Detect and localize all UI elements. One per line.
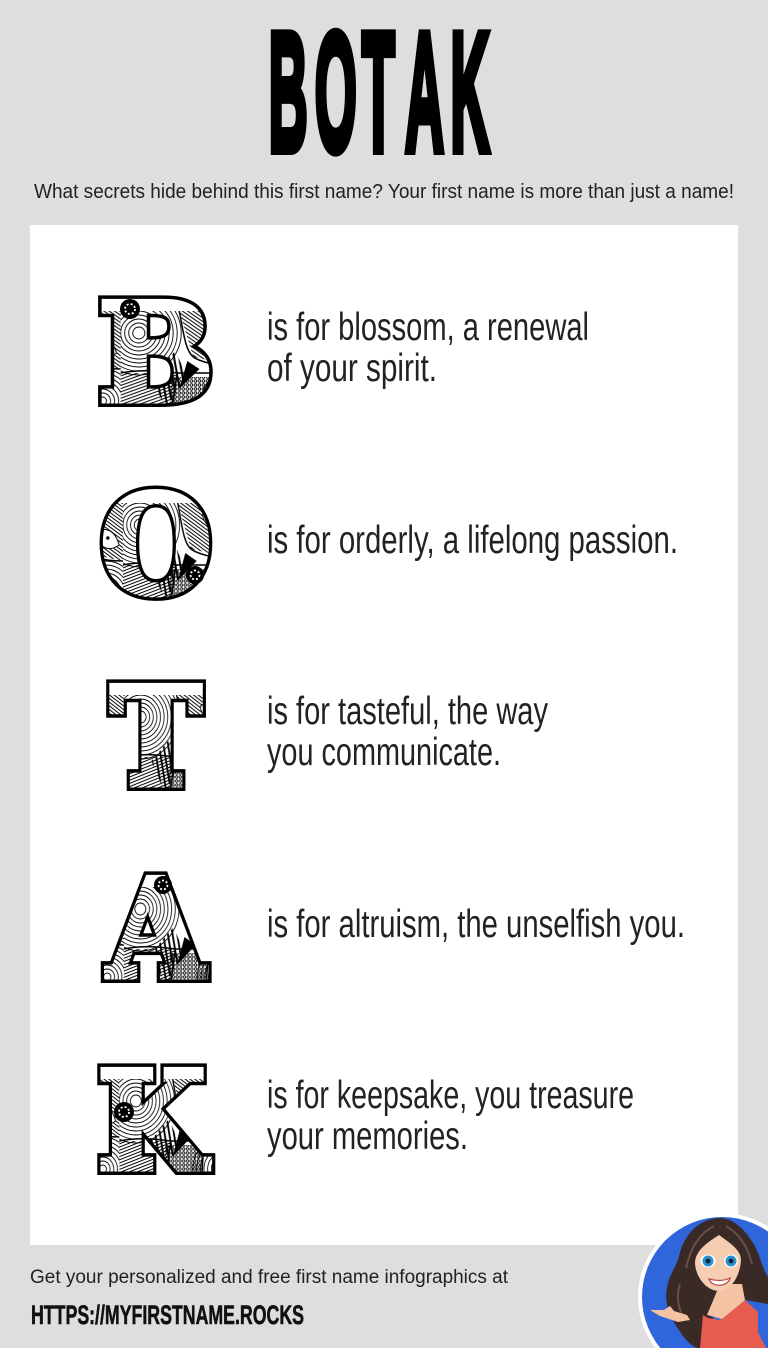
icon: letter K: K [98, 1043, 209, 1200]
text: B meaning: of your spirit. [267, 347, 437, 390]
text: B meaning: is for blossom, a renewal [267, 306, 589, 349]
card background [30, 225, 738, 1245]
mouth [709, 1278, 730, 1285]
face [695, 1235, 741, 1291]
icon: letter A: A [107, 851, 206, 1008]
text: K meaning [267, 1074, 634, 1158]
text: B meaning [267, 306, 589, 390]
hand [650, 1306, 690, 1322]
icon: letter T: T [111, 659, 201, 817]
subtitle: What secrets hide behind this first name? Your first name is more than just a name! [34, 181, 734, 203]
shirt [700, 1300, 766, 1348]
icon: letter B: B [99, 275, 213, 432]
icon: letter B: B [99, 275, 213, 432]
footer url: HTTPS://MYFIRSTNAME.ROCKS [31, 1300, 304, 1330]
text: T meaning [267, 690, 548, 774]
hair [666, 1218, 768, 1348]
text: K meaning: is for keepsake, you treasure [267, 1074, 634, 1117]
text: T meaning: is for tasteful, the way [267, 690, 548, 733]
icon: letter O: O [101, 467, 211, 624]
avatar ring and blue disc [638, 1213, 768, 1348]
eyes [700, 1254, 738, 1268]
text: K meaning: your memories. [267, 1115, 468, 1158]
icon: letter T: T [111, 659, 201, 817]
panel: name letters [30, 225, 738, 1245]
text: T meaning: you communicate. [267, 731, 501, 774]
footer text: Get your personalized and free first name infographics at [30, 1267, 509, 1288]
avatar [638, 1213, 768, 1348]
icon: letter A: A [107, 851, 206, 1008]
icon: letter O: O [101, 467, 211, 624]
icon: letter K: K [98, 1043, 209, 1200]
neck [707, 1284, 745, 1319]
title: BOTAK [269, 0, 489, 186]
